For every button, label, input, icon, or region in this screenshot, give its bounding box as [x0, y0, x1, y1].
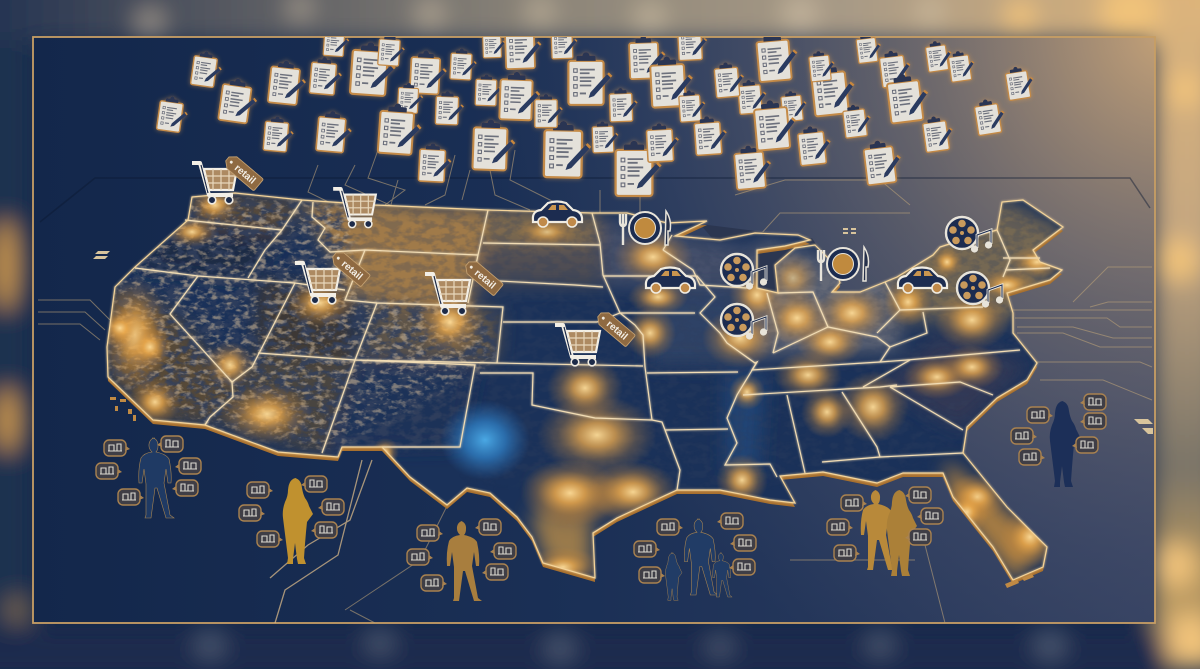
terrain texture, central and east	[345, 200, 1062, 490]
retail tag: retail	[232, 163, 258, 187]
clipboard	[450, 48, 478, 80]
clipboard	[435, 91, 464, 125]
map surface	[90, 187, 1080, 590]
icon: film reel, Missouri	[721, 304, 767, 340]
circuit traces	[38, 150, 1152, 623]
icon: film reel, New York	[946, 217, 992, 253]
clipboard	[316, 110, 353, 153]
clipboard	[650, 55, 694, 108]
icon: film reel, Wisconsin	[721, 254, 767, 290]
clipboard	[592, 121, 619, 153]
clipboard	[694, 115, 728, 155]
clipboard	[886, 71, 931, 124]
people: navy family with bubbles	[634, 513, 756, 600]
clipboard	[616, 141, 662, 196]
clipboard	[674, 37, 708, 64]
icon: cart with retail tag, Utah	[295, 249, 371, 304]
state borders	[135, 200, 1050, 490]
clipboard	[734, 144, 773, 190]
clipboard	[482, 30, 506, 58]
clipboard	[1004, 64, 1036, 101]
clipboard	[410, 50, 448, 95]
icon: cart with retail tag, Colorado	[425, 258, 504, 315]
retail tag: retail	[339, 259, 365, 283]
clipboard	[797, 124, 833, 166]
glowing hot spots	[98, 187, 1063, 587]
icon: plate, Minnesota	[620, 211, 670, 245]
clipboard	[378, 102, 423, 156]
map of the United States	[90, 187, 1080, 590]
clipboard	[810, 62, 857, 116]
clipboard	[535, 94, 563, 128]
clipboard	[737, 79, 768, 114]
retail tag: retail	[604, 319, 630, 343]
icon: cart with retail tag, Pacific Northwest	[192, 153, 264, 204]
clipboard	[502, 37, 543, 73]
clipboard	[544, 121, 592, 178]
islands	[110, 397, 1034, 588]
clipboard	[863, 138, 904, 185]
people with speech bubbles	[96, 394, 1106, 601]
clipboard	[156, 95, 190, 133]
icon: cart, northern Rockies	[333, 189, 376, 228]
Great Lakes shade	[700, 224, 842, 294]
clipboard	[378, 34, 406, 67]
clipboard	[756, 31, 800, 82]
clipboard	[350, 41, 397, 97]
clipboard	[753, 98, 798, 151]
clipboard	[320, 37, 351, 60]
clipboard	[646, 122, 680, 162]
person: navy woman with bubbles	[1011, 394, 1106, 487]
clipboard	[879, 49, 913, 88]
person: navy man with bubbles	[96, 436, 201, 518]
clipboard	[714, 61, 746, 98]
small tick marks	[93, 228, 1153, 434]
clipboard	[973, 97, 1008, 136]
clipboard	[925, 39, 954, 72]
terrain ridges, west	[108, 197, 497, 450]
clipboard	[472, 119, 516, 171]
clipboard	[678, 89, 707, 122]
map raised edge	[107, 197, 1063, 584]
clipboard	[190, 50, 224, 88]
clipboard	[397, 82, 424, 114]
clipboard	[268, 59, 308, 106]
clipboard	[263, 115, 295, 153]
icon: cart with retail tag, Kansas	[555, 309, 636, 366]
icon: film reel, New Jersey	[957, 272, 1003, 308]
icon: car, Dakotas	[533, 202, 582, 227]
clipboard	[948, 49, 977, 82]
clipboard	[418, 143, 452, 183]
icon: car, Ohio	[898, 268, 947, 293]
icon: plate, Michigan	[818, 247, 868, 281]
retail tag: retail	[472, 268, 498, 292]
terrain texture, west	[108, 197, 500, 455]
clipboards	[156, 24, 1036, 196]
clipboard	[629, 35, 666, 79]
person: gold woman with bubbles	[239, 476, 344, 564]
map coastline highlight	[107, 193, 1063, 580]
clipboard	[499, 71, 541, 121]
clipboard	[475, 74, 502, 106]
clipboard	[609, 87, 638, 122]
icon: car, Iowa	[646, 268, 695, 293]
person: tan man with bubbles	[407, 519, 516, 601]
people: gold couple with bubbles	[827, 487, 943, 576]
clipboard	[218, 77, 260, 125]
clipboard	[855, 32, 883, 64]
clipboard	[309, 56, 343, 96]
clipboard	[780, 90, 808, 122]
clipboard	[551, 27, 578, 59]
icons on the map	[192, 153, 1003, 366]
clipboard	[808, 50, 836, 82]
clipboard	[568, 52, 612, 105]
clipboard	[842, 103, 873, 138]
clipboard	[922, 114, 955, 153]
bright circuit traces	[270, 460, 372, 623]
